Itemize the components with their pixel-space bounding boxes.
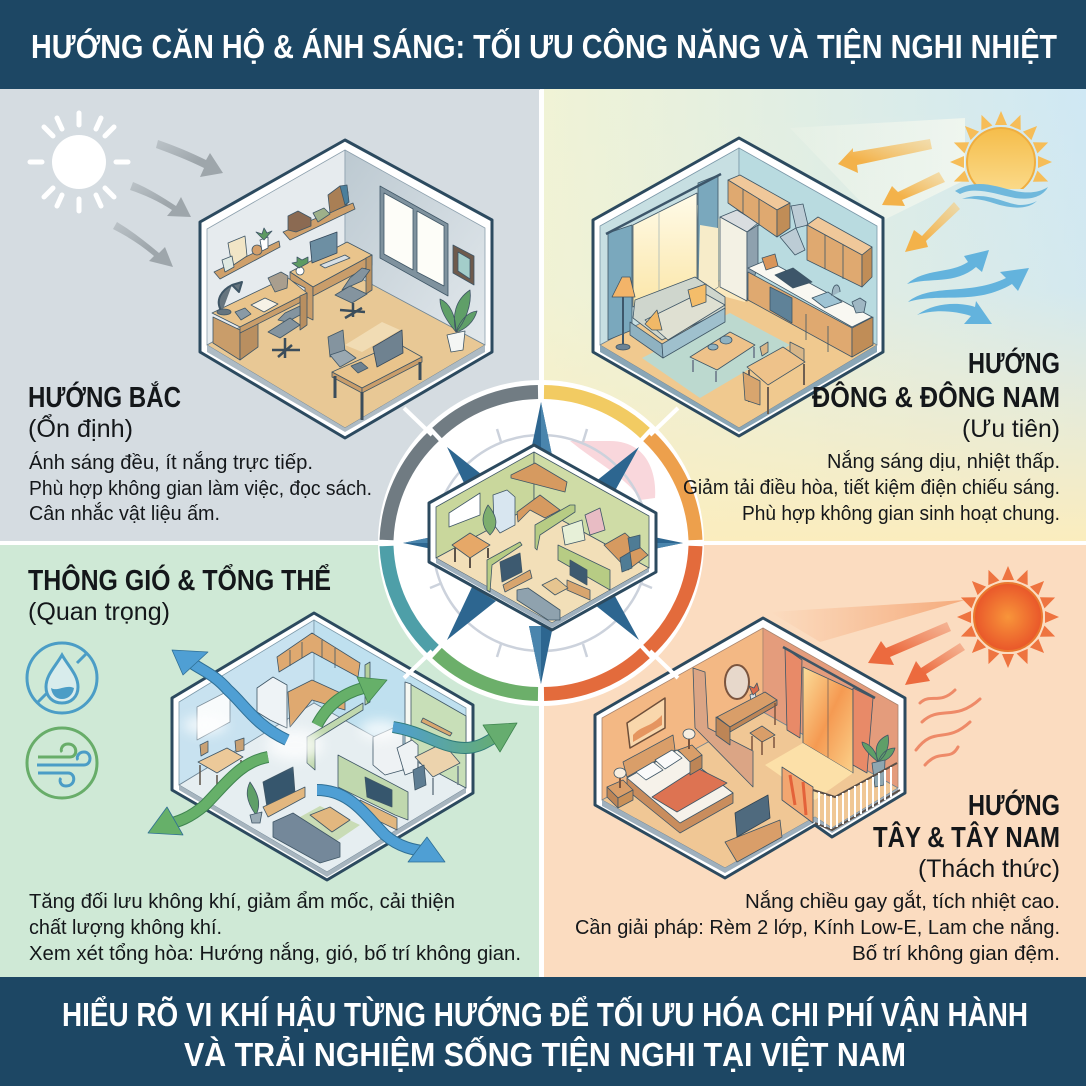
right wall (345, 150, 485, 345)
room shell (593, 138, 883, 436)
lower kitchen (288, 680, 345, 727)
text: west: Bố trí không gian đệm. (852, 942, 1060, 965)
panel: north background (0, 88, 540, 541)
compass (378, 380, 704, 706)
TV two (567, 560, 590, 600)
icon: white sun (30, 113, 128, 211)
light on floor (765, 743, 853, 800)
floor light patch (345, 322, 400, 352)
left desk (212, 272, 307, 360)
title banner (0, 0, 1086, 89)
arrows: morning sun (838, 139, 960, 252)
text: east: (Ưu tiên) (962, 415, 1060, 443)
inner tick ring (430, 429, 652, 657)
balcony railing (813, 763, 900, 830)
room shell (200, 140, 492, 438)
nightstand right (678, 729, 702, 775)
green partition (307, 662, 370, 770)
office desk (604, 533, 648, 572)
desk (413, 743, 460, 795)
panel: west background (544, 545, 1086, 977)
text: east: Giảm tải điều hòa, tiết kiệm điện chiếu sáng. (683, 476, 1060, 499)
window (449, 493, 480, 527)
right wall (314, 620, 466, 788)
arrows: west sun (868, 622, 965, 685)
half wall with heat (782, 767, 813, 823)
back desk (290, 232, 372, 320)
icon: west sun (957, 566, 1059, 668)
text: east: Phù hợp không gian sinh hoạt chung. (742, 502, 1060, 525)
counter and base cabinets (748, 254, 873, 357)
lamp (612, 277, 635, 350)
shelf with books (283, 185, 355, 240)
lower band (602, 788, 898, 873)
TV one (500, 553, 532, 592)
plant (440, 290, 477, 352)
text: ventilation (28, 563, 521, 965)
illustration: east living and kitchen room (593, 138, 883, 436)
room shell (172, 613, 473, 880)
lower band (179, 785, 466, 877)
air mist (183, 716, 400, 761)
ventilation arrows (148, 650, 517, 862)
chair left (268, 306, 300, 358)
fridge and shelves (562, 508, 605, 545)
light beam (790, 118, 965, 222)
upper cabinets left (728, 175, 790, 237)
fridge (720, 210, 758, 301)
curtains (783, 647, 875, 773)
text: ventilation: chất lượng không khí. (29, 916, 222, 939)
floor (207, 270, 485, 428)
text: east: Nắng sáng dịu, nhiệt thấp. (827, 450, 1060, 473)
arrow: south-west airflow (148, 757, 268, 835)
picture (453, 245, 474, 285)
heat waves (916, 690, 980, 765)
arrows: east breeze (907, 250, 1029, 324)
plant (862, 735, 895, 787)
sofa (630, 277, 725, 358)
kitchen partition (535, 505, 575, 550)
window (197, 690, 230, 740)
range hood (780, 204, 808, 255)
text: west (575, 788, 1060, 965)
illustration: west bedroom (595, 618, 905, 878)
dining set (743, 342, 805, 414)
text: east (683, 346, 1060, 525)
partition wall (693, 668, 753, 787)
lower band (207, 345, 485, 432)
vanity (716, 692, 777, 755)
text: ventilation: THÔNG GIÓ & TỔNG THỂ (28, 563, 331, 597)
fridge (257, 677, 287, 728)
arrows: north light (113, 140, 223, 267)
picture (627, 698, 665, 748)
appliances (373, 728, 418, 775)
text: north: HƯỚNG BẮC (28, 380, 181, 414)
icon: no humidity (27, 643, 97, 713)
balcony door (803, 667, 853, 773)
compass star (403, 402, 683, 684)
panel: east background (544, 88, 1086, 541)
plant (247, 782, 262, 823)
right room wall (410, 684, 466, 788)
mirror (725, 665, 749, 699)
coffee table (300, 806, 360, 842)
text: ventilation: (Quan trọng) (28, 598, 170, 626)
text: north (28, 380, 372, 525)
partition left (487, 542, 522, 592)
nightstand left (607, 768, 633, 808)
sofa (517, 588, 560, 620)
dining table (198, 738, 244, 795)
fridge (493, 490, 515, 533)
kitchen cabinets (511, 463, 567, 522)
partition right (558, 545, 610, 590)
text: north: Phù hợp không gian làm việc, đọc sách. (29, 477, 372, 500)
white disc (378, 380, 704, 706)
upper cabinets (277, 633, 360, 677)
TV (725, 795, 782, 862)
curtains (606, 174, 721, 340)
sofa (273, 813, 340, 863)
text: north: Cân nhắc vật liệu ấm. (29, 502, 220, 525)
footer banner (0, 977, 1086, 1086)
illustration: ventilation room (148, 613, 517, 880)
left wall (602, 628, 763, 800)
arrow: north-east airflow (317, 677, 387, 725)
icon: wind (27, 728, 97, 798)
window (380, 186, 448, 296)
text: west: Cần giải pháp: Rèm 2 lớp, Kính Low-E, Lam che nắng. (575, 916, 1060, 939)
pink watermark (570, 441, 655, 500)
dining table (452, 533, 490, 568)
coffee table (542, 578, 568, 595)
text: north: Ánh sáng đều, ít nắng trực tiếp. (29, 451, 313, 474)
arrow: south-east airflow (317, 790, 445, 862)
vase (749, 683, 759, 706)
illustration: central apartment model (429, 445, 656, 630)
text: west: (Thách thức) (918, 855, 1060, 883)
front desk set (328, 330, 422, 420)
coffee table (690, 332, 755, 382)
footer banner: VÀ TRẢI NGHIỆM SỐNG TIỆN NGHI TẠI VIỆT NAM (184, 1035, 906, 1073)
lower band (600, 345, 877, 432)
right wall (763, 628, 898, 788)
left wall (207, 150, 345, 345)
text: west: HƯỚNG (968, 788, 1060, 822)
upper cabinets right (807, 217, 872, 287)
coloured ring segments (386, 392, 696, 694)
shelf with frames (214, 228, 280, 279)
left wall (600, 148, 739, 345)
arrow: east airflow (393, 723, 517, 752)
arrow: north-west airflow (172, 650, 287, 740)
text: north: (Ổn định) (28, 413, 133, 443)
bed (623, 735, 733, 833)
text: west: Nắng chiều gay gắt, tích nhiệt cao. (745, 890, 1060, 913)
illustration: north office room (200, 140, 492, 438)
right wall (739, 148, 877, 345)
floor (602, 712, 898, 868)
partition front (338, 755, 408, 830)
panel: ventilation background (0, 545, 540, 977)
text: ventilation: Xem xét tổng hòa: Hướng nắng, gió, bố trí không gian. (29, 942, 521, 965)
icon: east sun over waves (950, 111, 1052, 208)
rug (642, 313, 790, 398)
window and light (633, 193, 745, 307)
TV one (263, 767, 305, 817)
shelf (421, 718, 452, 736)
plant (483, 505, 496, 535)
left wall (179, 620, 314, 785)
text: ventilation: Tăng đối lưu không khí, giảm ẩm mốc, cải thiện (29, 890, 455, 913)
floor (600, 270, 877, 428)
text: east: HƯỚNG (968, 346, 1060, 380)
chair back (335, 268, 370, 318)
floor (179, 703, 466, 872)
heat beam (770, 600, 965, 642)
room shell (595, 618, 905, 878)
